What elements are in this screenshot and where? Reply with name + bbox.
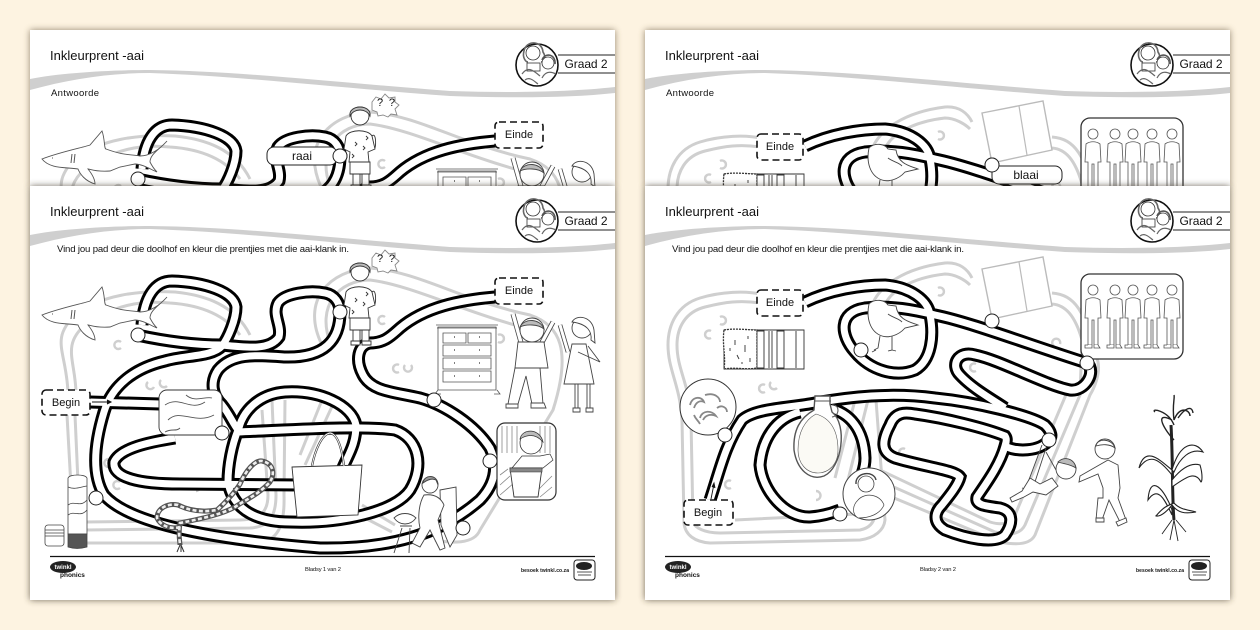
start box: Begin bbox=[694, 507, 722, 519]
subheading: Antwoorde bbox=[51, 88, 99, 99]
end box: Einde bbox=[505, 285, 533, 297]
panel: back worksheet left (answers) bbox=[25, 25, 620, 188]
avatar badge bbox=[1131, 199, 1173, 242]
start box bbox=[684, 500, 733, 525]
maze and pictures, answer sheet right bbox=[666, 100, 1184, 186]
footer: besoek twinkl.co.za bbox=[521, 568, 569, 574]
avatar badge bbox=[516, 199, 558, 242]
start box: Begin bbox=[52, 397, 80, 409]
grade label: Graad 2 bbox=[564, 214, 608, 228]
twinkl phonics logo: twinkl bbox=[669, 565, 687, 571]
end box bbox=[757, 134, 803, 160]
grade label: Graad 2 bbox=[1180, 57, 1223, 71]
instruction: Vind jou pad deur die doolhof en kleur die prentjies met die aai-klank in. bbox=[57, 244, 349, 255]
end box bbox=[495, 122, 543, 148]
twinkl phonics logo bbox=[50, 561, 85, 579]
heading: Inkleurprent -aai bbox=[50, 204, 144, 219]
arrow from start bbox=[92, 400, 111, 404]
footer: Bladsy 2 van 2 bbox=[920, 567, 956, 573]
grade label: Graad 2 bbox=[564, 57, 608, 71]
instruction: Vind jou pad deur die doolhof en kleur die prentjies met die aai-klank in. bbox=[672, 244, 964, 255]
pill connector circle bbox=[333, 149, 347, 163]
twinkl phonics logo: twinkl bbox=[54, 565, 72, 571]
word pill: raai bbox=[267, 147, 337, 165]
word pill: blaai: blaai bbox=[1013, 168, 1039, 182]
grade label bbox=[558, 55, 615, 73]
word pill: blaai bbox=[992, 166, 1062, 184]
footer bbox=[50, 556, 595, 580]
grade label bbox=[1173, 55, 1230, 73]
grade label bbox=[1173, 212, 1230, 230]
twinkl phonics logo: phonics bbox=[675, 572, 700, 579]
maze with pictures bbox=[42, 250, 600, 553]
panel: back worksheet right (answers) bbox=[640, 25, 1235, 188]
twinkl phonics logo bbox=[665, 561, 700, 579]
arrow from start bbox=[711, 483, 715, 499]
start box bbox=[42, 390, 90, 415]
end box bbox=[757, 290, 803, 316]
heading: Inkleurprent -aai bbox=[665, 204, 759, 219]
footer bbox=[665, 556, 1210, 580]
maze and pictures, answer sheet left bbox=[41, 94, 596, 186]
grade label bbox=[558, 212, 615, 230]
avatar badge bbox=[1131, 43, 1173, 86]
end box: Einde bbox=[766, 141, 794, 153]
pill connector circle bbox=[985, 158, 999, 172]
heading: Inkleurprent -aai bbox=[665, 48, 759, 63]
end box: Einde bbox=[505, 129, 533, 141]
maze with pictures bbox=[668, 257, 1203, 544]
footer: Bladsy 1 van 2 bbox=[305, 567, 341, 573]
twinkl phonics logo: phonics bbox=[60, 572, 85, 579]
avatar badge bbox=[516, 43, 558, 86]
panel: front worksheet right bbox=[645, 186, 1230, 600]
end box bbox=[495, 278, 543, 304]
approval badge bbox=[574, 560, 595, 580]
panel: front worksheet left bbox=[30, 186, 615, 600]
footer: besoek twinkl.co.za bbox=[1136, 568, 1184, 574]
grade label: Graad 2 bbox=[1180, 214, 1223, 228]
word pill: raai: raai bbox=[292, 149, 312, 163]
subheading: Antwoorde bbox=[666, 88, 714, 99]
end box: Einde bbox=[766, 297, 794, 309]
heading: Inkleurprent -aai bbox=[50, 48, 144, 63]
approval badge bbox=[1189, 560, 1210, 580]
